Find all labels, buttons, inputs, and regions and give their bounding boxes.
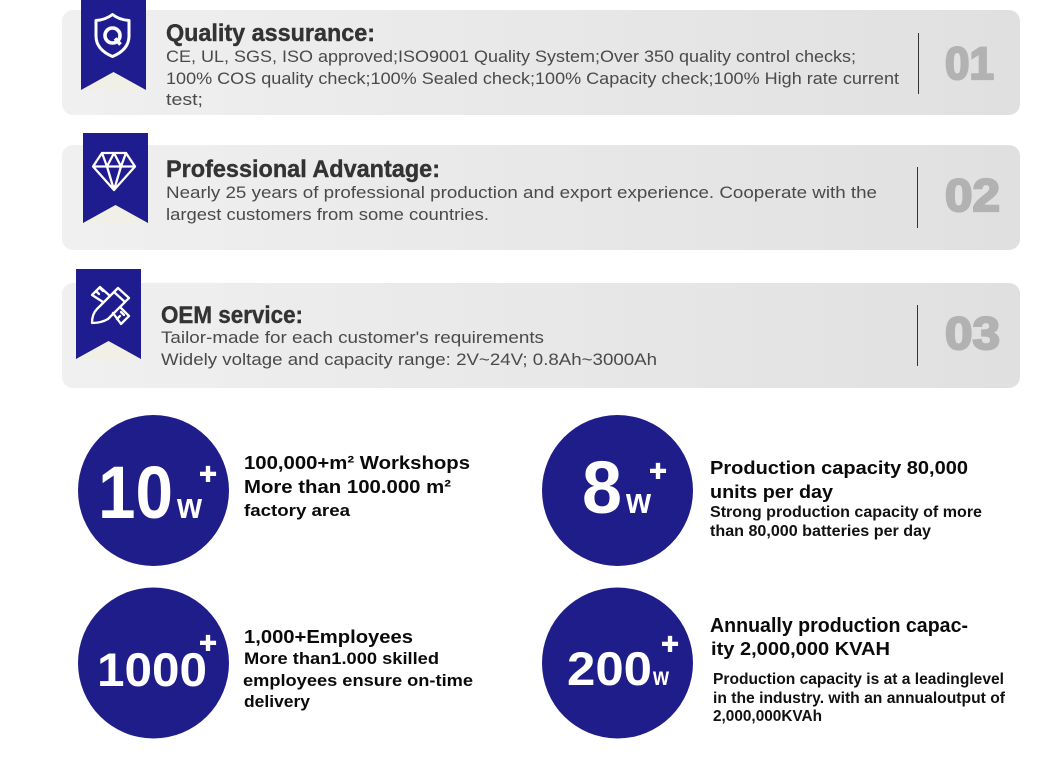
text: production per day [710, 457, 982, 540]
heading: quality assurance: Quality assurance: [166, 20, 375, 47]
panel: OEM service [62, 269, 1020, 388]
text: workshops [244, 452, 470, 520]
text: production per day: Production capacity 80,000 [710, 457, 968, 478]
icon: shield with Q [96, 14, 129, 56]
text: quality details: test; [166, 90, 203, 109]
badge: 200w+: + [661, 628, 679, 661]
stat: annual capacity [542, 588, 1006, 738]
text: production per day: than 80,000 batteries per day [710, 523, 931, 540]
heading: professional advantage: Professional Advantage: [166, 156, 440, 183]
ribbon: OEM [76, 269, 141, 359]
badge: 8w+: 8 [582, 446, 622, 529]
text: OEM details: Widely voltage and capacity range: 2V~24V; 0.8Ah~3000Ah [161, 350, 657, 369]
icon: pencil and ruler [92, 287, 129, 324]
badge: 1000+ [78, 588, 229, 738]
text: employees: 1,000+Employees [244, 626, 413, 647]
text: employees: delivery [244, 692, 311, 711]
badge: 200w+: 200 [567, 642, 652, 695]
text: professional details: Nearly 25 years of professional production and export experience. Cooperate with the [166, 183, 877, 202]
badge: 8w+: + [649, 455, 667, 488]
stat: production per day [542, 415, 982, 566]
badge: 200w+ [542, 588, 693, 738]
text: quality details: CE, UL, SGS, ISO approved;ISO9001 Quality System;Over 350 quality control checks; [166, 47, 856, 66]
ribbon: quality [81, 0, 146, 90]
text: annual capacity: 2,000,000KVAh [713, 708, 822, 725]
badge: 10w+: w [176, 485, 203, 526]
badge: 1000+: 1000 [97, 643, 207, 696]
text: production per day: units per day [710, 481, 834, 502]
text: quality details [166, 47, 899, 109]
text: professional details [166, 183, 877, 224]
panel: professional advantage [62, 133, 1020, 250]
text: annual capacity: ity 2,000,000 KVAH [711, 638, 890, 659]
text: professional details: largest customers from some countries. [166, 205, 489, 224]
text: employees: employees ensure on-time [243, 671, 473, 690]
stat: employees [78, 588, 473, 738]
text: employees [243, 626, 473, 711]
text: OEM details [161, 328, 657, 369]
text: annual capacity: in the industry. with an annualoutput of [713, 690, 1006, 707]
badge: 10w+ [78, 415, 229, 566]
badge: 8w+ [542, 415, 693, 566]
badge: 10w+: 10 [98, 451, 173, 534]
icon: diamond [93, 153, 135, 190]
number: 01: 01 [945, 38, 994, 89]
text: quality details: 100% COS quality check;100% Sealed check;100% Capacity check;100% High rate current [166, 69, 899, 88]
text: annual capacity: Production capacity is at a leadinglevel [713, 671, 1004, 688]
badge: 1000+: + [199, 627, 217, 660]
text: OEM details: Tailor-made for each customer's requirements [161, 328, 544, 347]
panel: quality assurance [62, 0, 1020, 115]
text: employees: More than1.000 skilled [244, 649, 439, 668]
badge: 10w+: + [199, 458, 217, 491]
text: production per day: Strong production capacity of more [710, 504, 982, 521]
text: workshops: factory area [244, 501, 351, 520]
ribbon: professional [83, 133, 148, 223]
text: annual capacity: Annually production capac- [710, 614, 968, 637]
text: annual capacity [710, 614, 1006, 725]
number: 03: 03 [945, 308, 1000, 359]
number: 02: 02 [945, 170, 1000, 221]
badge: 8w+: w [625, 480, 652, 521]
text: workshops: More than 100.000 m² [244, 476, 451, 497]
stat: workshops [78, 415, 470, 566]
heading: OEM service: OEM service: [161, 302, 303, 329]
badge: 200w+: w [652, 663, 669, 691]
text: workshops: 100,000+m² Workshops [244, 452, 470, 473]
